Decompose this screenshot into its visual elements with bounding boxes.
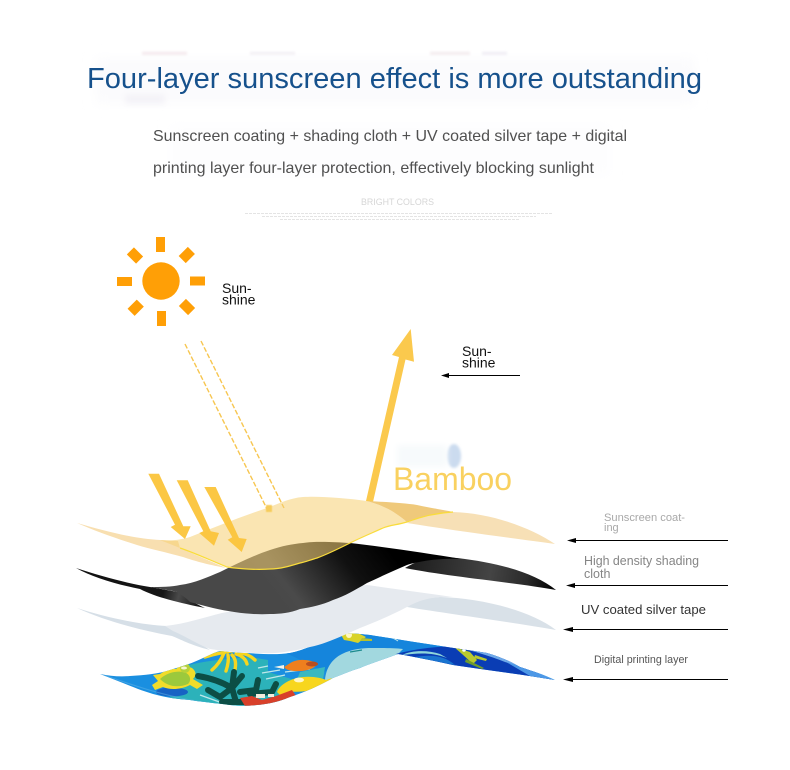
layer 3: UV coated silver tape xyxy=(77,585,556,653)
print pale swirl xyxy=(392,638,398,642)
label: sunscreen coating: ing xyxy=(604,522,619,534)
bamboo watermark: Bamboo xyxy=(393,461,512,497)
print pale stripes xyxy=(200,666,310,704)
print teal patch xyxy=(170,657,295,710)
layer 1: sunscreen coating xyxy=(77,497,555,569)
print whale xyxy=(325,648,403,680)
print yellow fish xyxy=(277,677,332,697)
incoming solid sun arrows xyxy=(148,474,247,552)
print green frog xyxy=(342,633,372,643)
label: UV coated silver tape xyxy=(563,602,728,632)
label: high density shading cloth xyxy=(566,554,728,588)
print coral xyxy=(198,672,276,702)
label: digital printing layer: Digital printing layer xyxy=(594,654,688,666)
description text: printing layer four-layer protection, effectively blocking sunlight xyxy=(153,160,595,177)
label: sunscreen coating: Sunscreen coat- xyxy=(604,512,685,524)
label: digital printing layer xyxy=(563,654,728,682)
description text: Sunscreen coating + shading cloth + UV coated silver tape + digital xyxy=(153,128,627,145)
print turtle xyxy=(152,663,203,690)
label: sunshine by sun: Sun- xyxy=(222,280,252,296)
label: sunshine by sun xyxy=(222,280,256,308)
reflected sunlight arrow xyxy=(366,329,414,502)
description text xyxy=(153,128,627,177)
bamboo watermark xyxy=(393,444,512,497)
print edge wash xyxy=(103,674,210,703)
print upper band xyxy=(286,633,444,672)
print back panel xyxy=(396,646,556,681)
label: UV coated silver tape: UV coated silver tape xyxy=(581,602,706,617)
label: sunshine reflected xyxy=(441,343,520,378)
title: Four-layer sunscreen effect is more outstanding xyxy=(87,63,702,95)
print yellow squid xyxy=(205,651,255,671)
faded background smudge behind title xyxy=(95,52,695,175)
layer 2: high density shading cloth xyxy=(76,542,556,614)
label: high density shading cloth: High density shading xyxy=(584,554,699,568)
dashed incoming sunlight xyxy=(185,341,284,511)
print green fish on back panel xyxy=(454,647,487,669)
label: sunscreen coating xyxy=(567,512,728,543)
icon: sun xyxy=(117,237,205,326)
print red crab xyxy=(240,690,296,706)
layer 4: digital printing layer xyxy=(100,633,555,706)
print orange crab xyxy=(274,660,318,671)
label: sunshine reflected: Sun- xyxy=(462,343,492,359)
label: sunshine reflected: shine xyxy=(462,354,496,370)
label: high density shading cloth: cloth xyxy=(584,567,610,581)
label: sunshine by sun: shine xyxy=(222,292,256,308)
faint caption: bright colors: BRIGHT COLORS xyxy=(361,197,434,208)
infographic canvas xyxy=(76,52,728,706)
print blue blob xyxy=(156,688,188,696)
